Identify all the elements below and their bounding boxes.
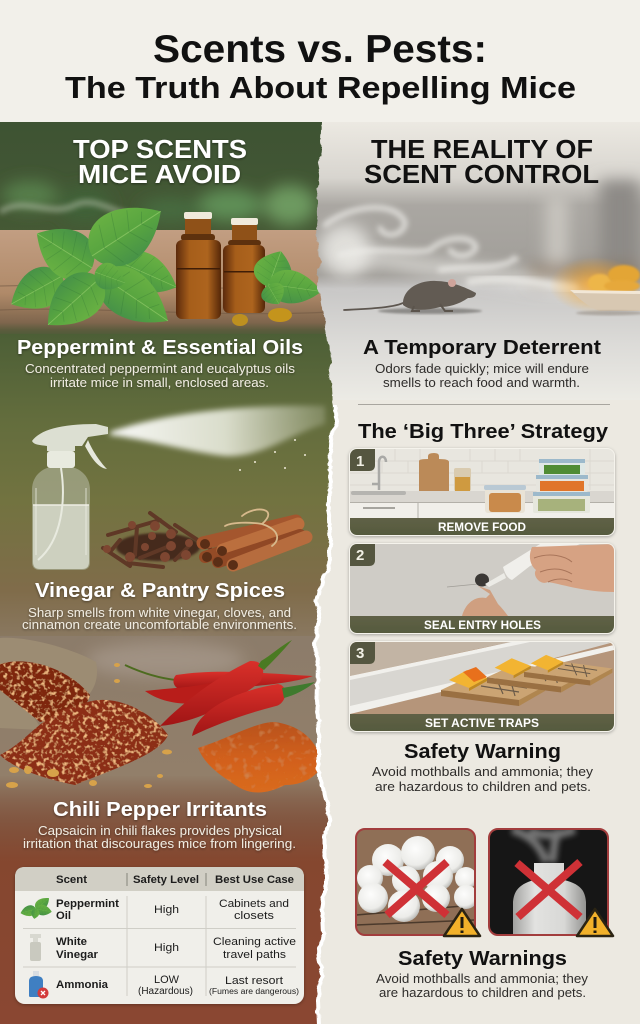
text: vinegar and pantry spices (22, 580, 297, 632)
scene: chili pepper (0, 636, 326, 802)
chili flakes (0, 661, 172, 788)
row: peppermint oil (20, 898, 288, 919)
text: safety warning: are hazardous to children and pets. (375, 780, 591, 794)
title banner (0, 0, 640, 122)
label: REMOVE FOOD (438, 520, 526, 534)
text: a temporary deterrent: A Temporary Deterrent (363, 337, 601, 359)
table header: Best Use Case (215, 874, 294, 886)
row: peppermint oil: High (154, 904, 179, 916)
entry hole (475, 574, 489, 586)
row: white vinegar: White (56, 936, 87, 948)
small mint sprig (254, 251, 320, 304)
text: safety warning: Safety Warning (404, 741, 561, 763)
heading: the reality of scent control: SCENT CONTROL (364, 159, 599, 189)
card 2: seal entry holes (349, 543, 615, 634)
caulk tube (485, 573, 506, 587)
food containers (484, 459, 590, 513)
cinnamon sticks (200, 509, 306, 570)
icon: spray bottle (30, 934, 41, 961)
row: peppermint oil: Cabinets and (219, 898, 289, 910)
text: vinegar and pantry spices: cinnamon create uncomfortable environments. (22, 618, 297, 632)
row: ammonia: (Fumes are dangerous) (209, 987, 299, 996)
chili powder (198, 722, 322, 792)
cloves (103, 513, 210, 567)
row: peppermint oil: closets (234, 910, 275, 922)
smoke wisps (319, 208, 575, 288)
panel: reality of scent control (310, 122, 640, 1000)
photo: mothballs crossed out (356, 829, 480, 936)
heading: top scents mice avoid: MICE AVOID (78, 159, 241, 189)
peppermint sprig (11, 208, 176, 326)
red cross (517, 862, 580, 917)
table header: Safety Level (133, 874, 199, 886)
title: The Truth About Repelling Mice (65, 70, 576, 105)
text: safety warning: Avoid mothballs and ammonia; they (372, 765, 594, 779)
text: safety warnings: are hazardous to children and pets. (379, 986, 586, 1000)
icon: mint leaf (20, 898, 52, 919)
row: peppermint oil: Oil (56, 910, 71, 922)
card 3: set active traps (349, 641, 615, 732)
text: safety warnings (376, 948, 589, 1000)
burlap sack (0, 638, 97, 730)
red cross (385, 862, 447, 915)
photo: ammonia bottle crossed out (489, 829, 613, 936)
essential oil bottle small (223, 218, 265, 313)
oil capsules (232, 308, 292, 326)
title (65, 28, 576, 105)
badge number: 3 (356, 645, 364, 662)
warning triangle (577, 909, 613, 936)
spray bottle (32, 424, 108, 570)
heading: top scents mice avoid (72, 140, 247, 186)
text: peppermint and essential oils: Concentrated peppermint and eucalyptus oils (25, 362, 295, 376)
panel: top scents mice avoid (0, 122, 345, 1024)
text: vinegar and pantry spices: Sharp smells from white vinegar, cloves, and (28, 606, 291, 620)
text: peppermint and essential oils: irritate mice in small, enclosed areas. (50, 376, 269, 390)
row: ammonia: Ammonia (56, 979, 109, 991)
scene: peppermint and essential oils (0, 181, 345, 342)
heading: the reality of scent control (364, 134, 599, 189)
spice jar (454, 468, 471, 491)
comparison table (15, 867, 304, 1004)
row: ammonia: (Hazardous) (138, 986, 193, 997)
scene: vinegar and pantry spices (32, 406, 325, 570)
table header: Scent (56, 874, 87, 886)
row: ammonia: Last resort (225, 975, 283, 987)
card 1: remove food (349, 448, 615, 536)
spray mist (110, 406, 325, 471)
bowl of food (549, 257, 640, 316)
text: safety warnings: Avoid mothballs and ammonia; they (376, 972, 589, 986)
row: ammonia (29, 971, 299, 998)
heading: the reality of scent control: THE REALITY OF (371, 134, 593, 164)
text: vinegar and pantry spices: Vinegar & Pantry Spices (35, 580, 285, 602)
row: white vinegar: High (154, 942, 179, 954)
badge number: 2 (356, 547, 364, 564)
faucet (372, 457, 386, 490)
chili peppers (125, 640, 315, 736)
warning triangle (444, 909, 480, 936)
text: chili pepper irritants: Capsaicin in chili flakes provides physical (38, 824, 282, 838)
text: chili pepper irritants: Chili Pepper Irritants (53, 799, 267, 821)
row: white vinegar: Cleaning active (213, 936, 296, 948)
heading: top scents mice avoid: TOP SCENTS (73, 134, 247, 164)
cutting board (419, 453, 449, 491)
text: safety warnings: Safety Warnings (398, 948, 567, 970)
row: white vinegar: travel paths (223, 949, 287, 961)
fingers below hole (462, 586, 508, 616)
hand (530, 544, 614, 592)
text: a temporary deterrent (363, 337, 601, 390)
table header (56, 875, 294, 886)
label: SET ACTIVE TRAPS (425, 716, 539, 730)
text: a temporary deterrent: Odors fade quickly; mice will endure (375, 362, 589, 376)
row: peppermint oil: Peppermint (56, 898, 119, 910)
essential oil bottle large (176, 212, 221, 319)
text: a temporary deterrent: smells to reach food and warmth. (383, 376, 580, 390)
text: safety warning (372, 741, 594, 794)
row: ammonia: LOW (154, 974, 180, 986)
text: peppermint and essential oils (17, 337, 303, 390)
row: white vinegar: Vinegar (56, 949, 99, 961)
row: white vinegar (30, 934, 296, 961)
text: chili pepper irritants (23, 799, 296, 851)
text: chili pepper irritants: irritation that discourages mice from lingering. (23, 837, 296, 851)
heading: big three strategy: The ‘Big Three’ Strategy (358, 421, 609, 443)
icon: ammonia jug (29, 971, 48, 998)
title: Scents vs. Pests: (153, 28, 487, 71)
mouse (344, 279, 482, 314)
label: SEAL ENTRY HOLES (424, 618, 541, 632)
badge number: 1 (356, 453, 364, 470)
text: peppermint and essential oils: Peppermint & Essential Oils (17, 337, 303, 359)
scene: mouse and fading smoke (310, 122, 640, 400)
